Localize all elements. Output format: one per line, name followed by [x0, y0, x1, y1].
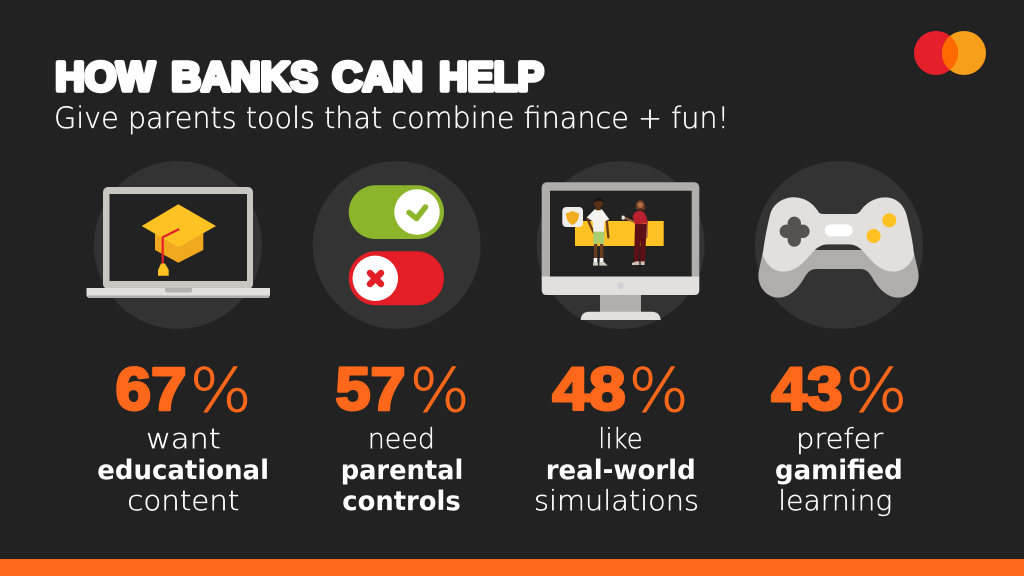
description: like real-world simulations: like [598, 422, 643, 455]
description: want educational content [97, 422, 269, 517]
panel: real-world simulations [534, 161, 705, 517]
panel: parental controls [313, 161, 481, 517]
statistic: 67% [116, 356, 252, 426]
title: HELP [439, 54, 544, 100]
description: like real-world simulations: simulations [534, 484, 699, 517]
title: CAN [332, 54, 423, 100]
icon: desktop monitor with people [537, 161, 705, 329]
description: need parental controls [341, 422, 463, 517]
icon: laptop with graduation cap [86, 161, 270, 329]
description: need parental controls: controls [342, 486, 461, 517]
title [55, 54, 544, 100]
description: prefer gamified learning [775, 422, 903, 517]
description: want educational content: want [146, 422, 221, 455]
statistic: 48%: 48 [552, 356, 626, 422]
description: want educational content: educational [97, 455, 269, 486]
statistic: 67%: % [190, 356, 252, 426]
statistic: 67%: 67 [116, 356, 186, 422]
subtitle: Give parents tools that combine finance + fun! [54, 101, 729, 135]
panel: educational content [86, 161, 270, 517]
figure: man [587, 198, 609, 266]
title: BANKS [171, 54, 318, 100]
icon: game controller [755, 161, 923, 329]
statistic: 57% [336, 356, 470, 426]
statistic: 43%: 43 [772, 356, 842, 422]
description: like real-world simulations: real-world [546, 455, 696, 486]
icon: shield badge [562, 207, 583, 227]
statistic: 57%: 57 [336, 356, 406, 422]
title: HOW [55, 54, 155, 100]
panel: gamified learning [755, 161, 923, 517]
description: want educational content: content [127, 484, 239, 517]
icon: brand logo circles [914, 31, 986, 75]
statistic: 43%: % [845, 356, 907, 426]
description: like real-world simulations [534, 422, 699, 517]
figure: woman [622, 200, 648, 265]
description: prefer gamified learning: learning [778, 484, 892, 517]
description: prefer gamified learning: gamified [775, 455, 903, 486]
statistic: 57%: % [410, 356, 470, 426]
description: prefer gamified learning: prefer [796, 422, 884, 455]
icon: toggle switches [313, 161, 481, 329]
description: need parental controls: need [368, 422, 435, 455]
statistic: 48%: % [629, 356, 689, 426]
statistic: 43% [772, 356, 907, 426]
footer bar [0, 559, 1024, 576]
statistic: 48% [552, 356, 689, 426]
description: need parental controls: parental [341, 455, 463, 486]
